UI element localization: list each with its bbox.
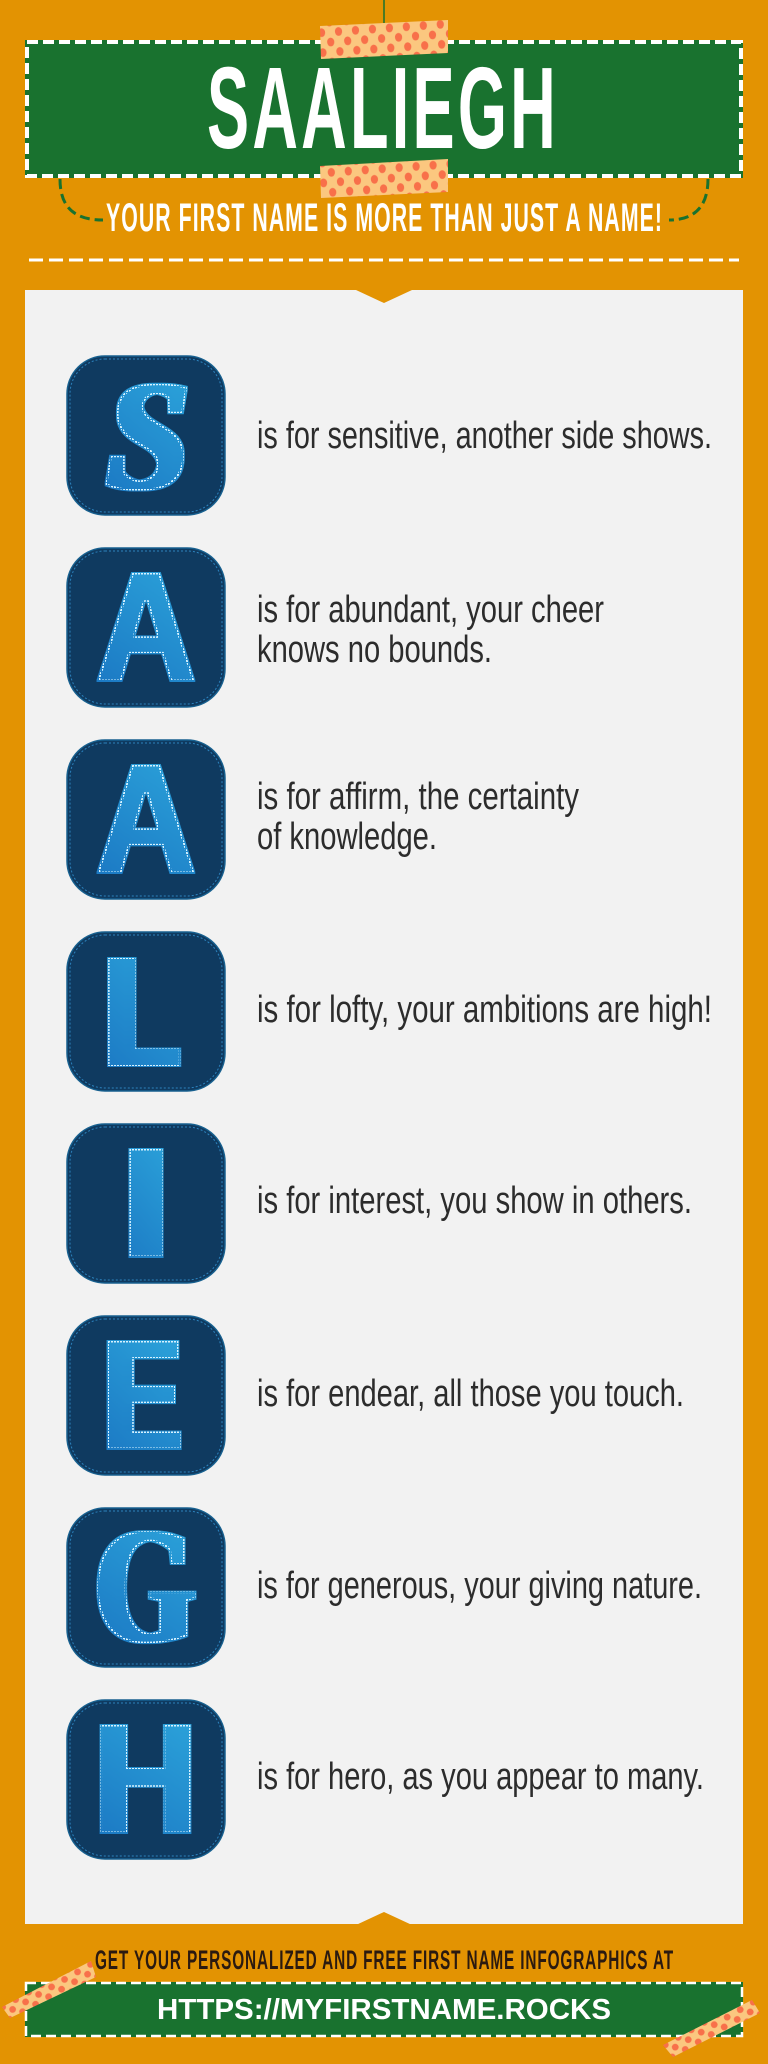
panel: letters xyxy=(25,290,743,1925)
divider xyxy=(29,258,739,262)
row: I xyxy=(67,1116,692,1291)
footer banner xyxy=(25,1982,743,2037)
bracket: left xyxy=(60,179,103,220)
row: S xyxy=(67,349,712,522)
row: A: is for affirm, the certainty xyxy=(257,776,579,818)
row: I: I xyxy=(116,1116,176,1291)
row: A xyxy=(67,732,579,907)
url: HTTPS://MYFIRSTNAME.ROCKS xyxy=(157,1994,611,2026)
row: A: is for abundant, your cheer xyxy=(257,589,604,631)
tape: footer left xyxy=(2,1961,96,2018)
row: H: H xyxy=(94,1692,197,1867)
tape: footer right xyxy=(663,2000,760,2057)
row: S: S xyxy=(107,349,189,522)
row: A: knows no bounds. xyxy=(257,629,492,671)
row: H xyxy=(67,1692,704,1867)
tape: top xyxy=(320,20,448,59)
row: E: E xyxy=(105,1308,180,1483)
row: L: L xyxy=(105,925,179,1100)
hanging line xyxy=(383,0,385,24)
tape: bottom xyxy=(320,159,448,198)
row: E xyxy=(67,1308,684,1483)
bracket: right xyxy=(669,179,708,220)
row: A: A xyxy=(96,732,196,907)
title banner xyxy=(25,40,743,178)
row: G: G xyxy=(95,1494,195,1677)
row: A: A xyxy=(96,540,196,715)
row: A xyxy=(67,540,604,715)
row: G xyxy=(67,1494,702,1677)
row: A: of knowledge. xyxy=(257,816,437,858)
row: L xyxy=(67,925,712,1100)
